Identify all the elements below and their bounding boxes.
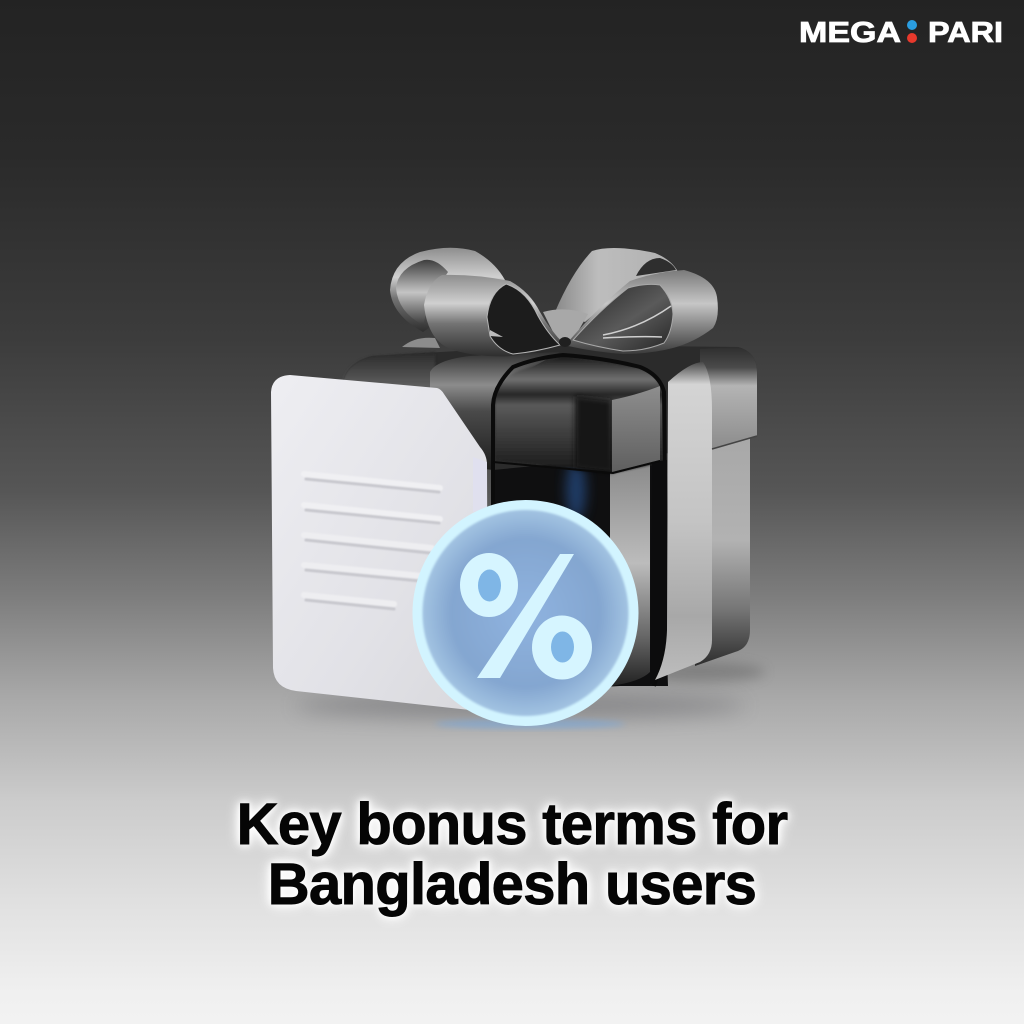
title: Bangladesh users bbox=[268, 852, 756, 917]
logo: MEGA PARI: PARI bbox=[928, 17, 1003, 49]
logo: MEGA PARI: MEGA bbox=[799, 17, 901, 49]
document text lines bbox=[304, 474, 440, 609]
blue reflection bbox=[566, 460, 586, 520]
silver body panel bbox=[610, 463, 650, 686]
lid ribbon left bbox=[430, 352, 560, 470]
black strip and outline bbox=[493, 355, 667, 690]
percent badge bbox=[412, 500, 638, 729]
front left loop bbox=[424, 275, 564, 356]
document bbox=[271, 375, 488, 712]
document side fold bbox=[473, 457, 487, 512]
lid right bbox=[700, 347, 757, 449]
lid centre panel bbox=[495, 356, 664, 473]
title: Key bonus terms for bbox=[237, 792, 787, 857]
percent sign bbox=[460, 553, 592, 680]
ribbon: back loops bbox=[390, 248, 678, 348]
gift box bbox=[343, 345, 757, 690]
box body bbox=[493, 455, 668, 688]
right face bbox=[695, 438, 750, 666]
centre tie bbox=[559, 337, 571, 347]
logo: MEGA PARI bbox=[799, 17, 1003, 49]
lid bottom edge bbox=[493, 461, 660, 473]
vertical ribbon band bbox=[655, 362, 712, 680]
lid base bbox=[343, 345, 757, 470]
logo colon dots bbox=[907, 20, 917, 43]
front right loop bbox=[568, 270, 718, 354]
knot bbox=[543, 309, 588, 342]
ribbon: front loops and knot bbox=[424, 270, 718, 356]
ground shadow bbox=[295, 662, 765, 718]
lid left bbox=[343, 352, 435, 465]
title bbox=[232, 792, 793, 922]
